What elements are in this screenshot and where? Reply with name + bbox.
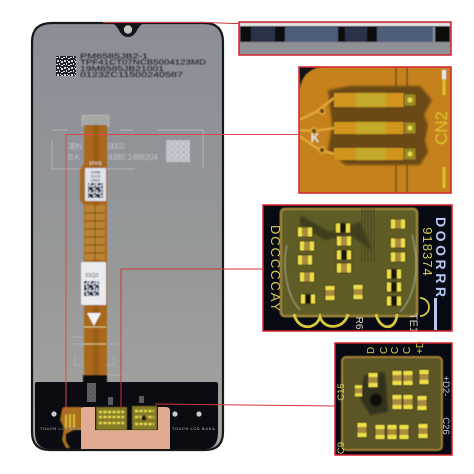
top component labels: C bbox=[390, 347, 401, 354]
blue-grey segment bbox=[285, 27, 338, 42]
inset: right chip closeup bbox=[335, 341, 452, 455]
touch lcd band text: TOUCH LCD BAKA bbox=[172, 426, 216, 431]
orange board rim bbox=[281, 209, 417, 316]
first white label: 01688 bbox=[91, 170, 100, 174]
top component labels bbox=[366, 341, 426, 354]
inset D border bbox=[335, 343, 452, 455]
front camera bbox=[124, 25, 132, 34]
touch lcd band text: TOUCH LCD BAKA bbox=[40, 426, 84, 431]
vertical trace outlines bbox=[396, 67, 407, 192]
olive chip board bbox=[342, 357, 442, 450]
faint printed marking text: B K bbox=[68, 153, 81, 162]
TE1 marking: TE1 bbox=[407, 313, 419, 333]
faint printed marking text: 4385 1488204 bbox=[108, 153, 159, 162]
left traces bbox=[299, 98, 334, 154]
faint printed marking text: 3BN bbox=[68, 142, 82, 151]
thin traces bbox=[362, 208, 374, 262]
inset: touch connector closeup bbox=[299, 67, 451, 193]
second white label: 01Q2 bbox=[85, 273, 99, 279]
C15 marking: C15 bbox=[336, 383, 347, 401]
dark navy segment bbox=[345, 27, 367, 42]
callout line: left chip bbox=[121, 269, 264, 409]
white down arrow bbox=[87, 313, 101, 326]
black bottom panel bbox=[35, 382, 218, 449]
D2 marking: +D2- bbox=[440, 376, 451, 396]
bottom left touch connector bbox=[60, 407, 82, 448]
vivo logo: vivo bbox=[89, 161, 102, 167]
yellow highlights on pads bbox=[356, 93, 386, 160]
inset: top edge closeup bbox=[239, 22, 451, 55]
yellow test table bbox=[85, 205, 105, 260]
orange flex strip bbox=[80, 125, 107, 375]
pad three bbox=[334, 148, 404, 160]
callout line: touch connector bbox=[66, 134, 299, 415]
black round component bbox=[370, 394, 382, 406]
callout line: right chip bbox=[155, 404, 335, 406]
components bbox=[297, 218, 406, 306]
faint printed marking text: 0002 bbox=[108, 142, 126, 151]
left silkscreen markings: DCCCCCAY bbox=[268, 225, 283, 311]
chip cutout bbox=[95, 405, 158, 430]
dark navy segment bbox=[251, 27, 275, 42]
first white label bbox=[85, 168, 106, 201]
pink protective film bbox=[81, 407, 170, 449]
serial number label: 0123ZC11500240587 bbox=[80, 72, 183, 79]
serial number label: TPF41CT07NCB5004123MD bbox=[80, 60, 206, 66]
right silkscreen markings: DOORRR bbox=[433, 217, 449, 297]
dark smudge bbox=[300, 215, 372, 250]
first white label: 61418 bbox=[91, 174, 100, 178]
R6 marking: R6 bbox=[353, 317, 364, 330]
top component labels: C bbox=[379, 347, 390, 354]
C9 marking: C9 bbox=[336, 442, 347, 454]
silver tab bbox=[82, 115, 109, 126]
first white label: 53661 bbox=[91, 178, 100, 182]
QR code on display bbox=[56, 56, 76, 76]
touch lcd band text bbox=[40, 426, 216, 431]
yellow ring bbox=[420, 298, 429, 316]
top component labels: C bbox=[402, 347, 413, 354]
gold chip left bbox=[96, 407, 127, 430]
serial number label: PM6585JB2-1 bbox=[80, 54, 148, 60]
value markings: 918374 bbox=[420, 227, 435, 277]
faint printed marking text bbox=[68, 142, 159, 162]
callout line: top edge bbox=[103, 22, 239, 24]
white alignment dots bbox=[51, 411, 202, 417]
C26 marking: C26 bbox=[440, 417, 451, 435]
top component labels: +D bbox=[415, 341, 426, 354]
flex divider lines bbox=[84, 327, 106, 344]
phone display back bbox=[32, 23, 223, 450]
K marking: K bbox=[311, 131, 320, 145]
dark corner bbox=[299, 67, 322, 90]
yellow edge marks bbox=[442, 70, 446, 188]
top component labels: D bbox=[366, 347, 377, 354]
serial number label: 19M6585JB21001 bbox=[80, 66, 164, 73]
faint QR code bbox=[166, 140, 190, 162]
pad two bbox=[334, 122, 404, 134]
second white label bbox=[81, 262, 106, 305]
faint printed marking frame bbox=[52, 130, 203, 169]
faint lower printed marks bbox=[72, 337, 123, 375]
square end pads bbox=[404, 94, 416, 160]
inset: left chip closeup bbox=[263, 205, 452, 333]
pad one bbox=[334, 93, 404, 107]
blue edge bar bbox=[434, 298, 437, 330]
olive chip board bbox=[280, 208, 418, 317]
gold chip right bbox=[132, 406, 157, 430]
dark notch band bbox=[240, 26, 450, 42]
phone body outline bbox=[32, 23, 223, 450]
components bbox=[354, 369, 430, 440]
flex cable bbox=[80, 115, 109, 383]
serial number label bbox=[80, 54, 206, 79]
yellow arcs bbox=[294, 314, 397, 327]
black band on flex bbox=[83, 375, 107, 383]
dark smudge bbox=[360, 372, 388, 415]
CN2 marking: CN2 bbox=[432, 111, 451, 145]
dark solder region bbox=[328, 86, 432, 165]
film sheen bbox=[285, 235, 416, 312]
top notch bbox=[110, 23, 146, 37]
inset C border bbox=[263, 205, 452, 331]
blue-grey segment bbox=[377, 27, 433, 42]
inset B border bbox=[299, 67, 451, 193]
small components marks on panel bbox=[87, 383, 144, 405]
inset A border bbox=[239, 22, 451, 55]
